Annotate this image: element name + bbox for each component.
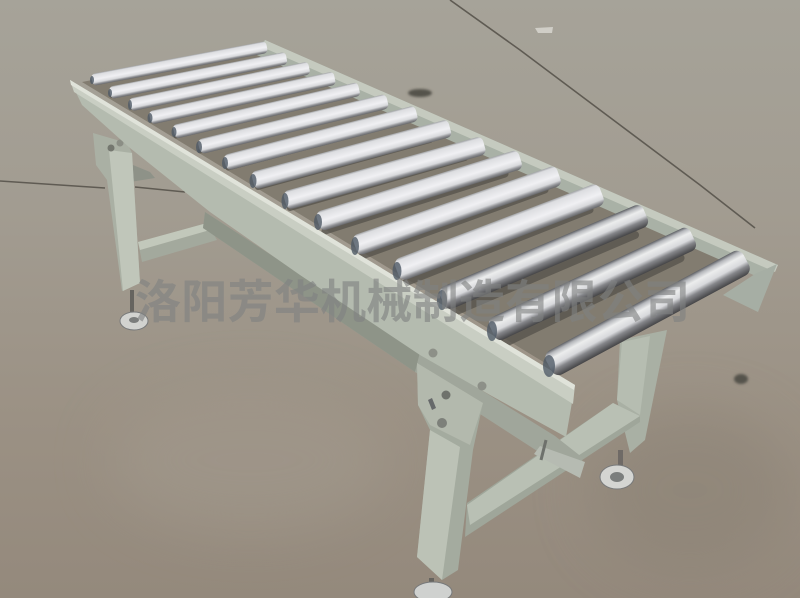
rear right leg (617, 330, 667, 453)
roller 15 (543, 248, 753, 378)
roller 12 (393, 182, 606, 282)
roller 6 (197, 94, 389, 154)
near rail face (70, 80, 575, 437)
roller 5 (172, 82, 361, 139)
roller 11 (352, 165, 562, 256)
roller shadows (112, 64, 680, 345)
roller 4 (149, 71, 336, 125)
near rail edge (70, 80, 575, 390)
left leg (93, 133, 148, 330)
far rail edge (262, 40, 778, 272)
far crossbar (128, 163, 217, 262)
roller 8 (251, 119, 452, 190)
roller 3 (129, 62, 311, 111)
front foot (414, 578, 452, 598)
roller 13 (437, 203, 650, 311)
roller 14 (487, 226, 698, 342)
far rail end (723, 264, 777, 312)
watermark: 洛阳芳华机械制造有限公司 (135, 276, 690, 328)
drive shaft and lower beam (203, 212, 585, 478)
rear right foot (600, 450, 634, 489)
near rail flange (70, 80, 575, 404)
roller 1 (91, 41, 268, 86)
front bracket and leg (417, 348, 486, 580)
roller 7 (223, 105, 419, 171)
roller 9 (282, 136, 487, 210)
roller end caps (90, 76, 555, 377)
far rail flange (250, 40, 778, 278)
rollers (91, 41, 753, 378)
near crossbar (465, 403, 640, 537)
roller 10 (315, 149, 523, 232)
roller 2 (109, 52, 288, 99)
roller bed seen through the frame (82, 46, 745, 372)
